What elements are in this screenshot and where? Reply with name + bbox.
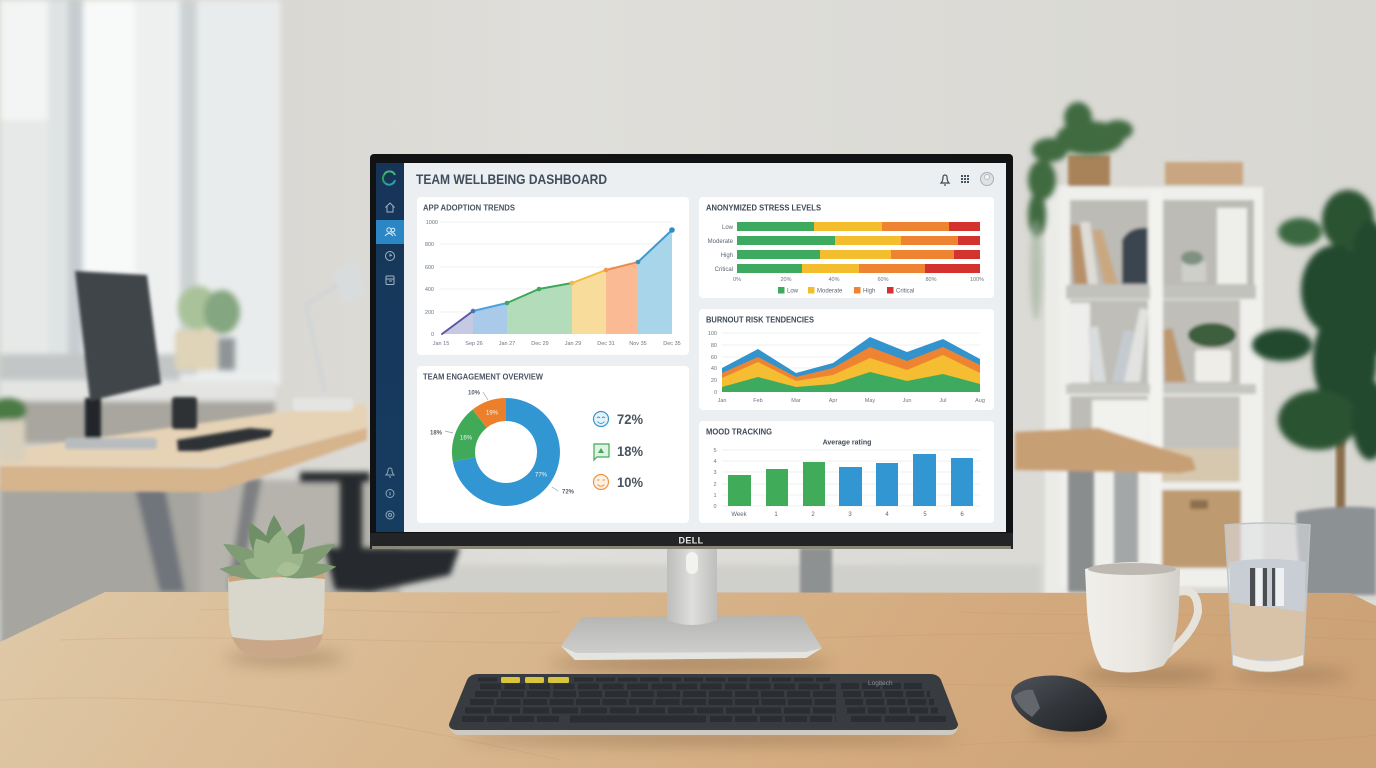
window [0,0,280,443]
stacked area chart: Jul [939,398,947,404]
large floor plant [1252,190,1376,595]
stacked area chart: Feb [753,398,763,404]
monitor [370,154,1013,549]
bar chart: 6 [960,512,964,518]
chart subtitle: Average rating [823,440,871,446]
heading: BURNOUT RISK TENDENCIES [706,314,814,324]
bar chart: 2 [713,482,717,488]
bar chart: 3 [713,470,717,476]
right desk [1015,428,1196,592]
stacked bar chart: 40% [828,277,840,283]
area chart: Dec 29 [531,341,549,347]
icon: home [386,203,394,212]
stacked area chart: May [865,398,875,404]
stacked area chart [708,331,985,404]
bar chart: 1 [713,493,717,499]
left background monitor [65,271,273,451]
hanging plant [1028,102,1133,320]
donut chart: 10% [468,390,481,396]
area chart: Jan 29 [565,341,581,347]
far monitor-side stand leg [800,548,832,596]
area chart: 200 [425,310,434,316]
keyboard [449,674,958,735]
panel: mood tracking [699,421,994,523]
bar chart: 5 [923,512,927,518]
mouse [1011,676,1107,732]
area chart: Jan 27 [499,341,515,347]
panel: anonymized stress levels [699,197,994,298]
stat: 72% happy: 72% [617,411,644,427]
area chart: Sep 26 [465,341,483,347]
bar chart [713,448,980,518]
chair [300,472,460,592]
heading: TEAM ENGAGEMENT OVERVIEW [423,372,544,382]
keys [462,680,946,719]
area chart: 600 [425,265,434,271]
donut chart: 18% [430,430,443,436]
bar chart: 4 [713,459,717,465]
stacked area chart: Mar [791,398,801,404]
stacked area chart: 0 [714,390,717,396]
stacked area chart: Aug [975,398,985,404]
bar chart: 2 [811,512,815,518]
icon: users [385,228,396,236]
stacked area chart: Jan [718,398,726,404]
panel: app adoption trends [417,197,689,355]
icon: avatar [980,172,994,186]
stacked area chart: Jun [903,398,911,404]
icon: logo [383,171,395,185]
area chart: 400 [425,287,434,293]
area chart: Dec 35 [663,341,681,347]
donut chart [430,390,575,506]
donut chart: 77% [535,472,548,478]
panel: burnout risk tendencies [699,309,994,410]
top bar icons [941,172,994,186]
heading: APP ADOPTION TRENDS [423,202,515,212]
stacked bar chart [708,222,984,294]
area chart [425,220,681,347]
brand logo: DELL [678,536,704,546]
panel: team engagement overview [417,366,689,523]
monitor bezel [370,154,1013,549]
sidebar [376,163,404,532]
stat: 18% feedback [594,443,644,460]
desk lamp [293,256,367,411]
dashboard screen [376,163,1006,532]
succulent in ceramic pot [219,515,339,659]
monitor stand [561,546,822,660]
stacked bar chart: Critical [715,267,733,273]
donut chart: 19% [486,410,499,416]
stacked area chart: 100 [708,331,717,337]
legend [778,287,914,294]
bar chart: 1 [774,512,778,518]
stacked bar chart: 0% [733,277,741,283]
stacked area chart: 60 [711,355,717,361]
bar chart: 3 [848,512,852,518]
leaves [219,515,339,584]
title: TEAM WELLBEING DASHBOARD [416,171,607,187]
stacked area chart: Apr [829,398,837,404]
window plants [0,286,240,462]
left desk [0,404,367,492]
icon: app grid [961,175,969,183]
icon: clock [386,252,394,260]
bar chart: 4 [885,512,889,518]
stacked bar chart: 80% [925,277,937,283]
shadows on desk [225,652,1350,744]
bar chart: Week [731,512,748,518]
icon: bell [386,468,394,477]
area chart: Jan 15 [433,341,449,347]
stacked bar chart: Moderate [708,239,734,245]
donut chart: 16% [460,436,473,442]
stacked bar chart: 60% [877,277,889,283]
pot [228,572,325,659]
area chart: 0 [431,332,434,338]
heading: MOOD TRACKING [706,426,772,436]
area chart: Nov 35 [629,341,647,347]
stacked bar chart: High [721,253,733,259]
icon: settings [386,511,394,519]
area chart: Dec 31 [597,341,615,347]
floor and under-desk region [0,478,1040,648]
heading: ANONYMIZED STRESS LEVELS [706,202,821,212]
stat: 72% happy [594,411,644,427]
icon: calendar [386,276,394,284]
stacked area chart: 20 [711,378,717,384]
stacked bar chart: 20% [780,277,792,283]
brand label: Logitech [868,680,893,687]
desk surface [0,592,1376,768]
books [1070,225,1088,284]
stat: 10% neutral: 10% [617,474,644,490]
stacked area chart: 80 [711,343,717,349]
coffee mug [1085,562,1198,673]
stat: 10% neutral [594,474,644,490]
legend: Moderate [817,288,843,294]
icon: notification bell [941,175,949,185]
legend: High [863,288,875,294]
area chart: 800 [425,242,434,248]
stacked bar chart: 100% [970,277,984,283]
water glass [1225,523,1310,672]
bar chart: 0 [713,504,717,510]
donut chart: 72% [562,490,575,496]
stacked area chart: 40 [711,366,717,372]
stat: 18% feedback: 18% [617,443,644,459]
yellow function keys [501,677,569,683]
bookshelf [1045,155,1263,595]
bar chart: 5 [713,448,717,454]
legend: Critical [896,288,914,294]
icon: info [386,490,394,498]
legend: Low [787,288,799,294]
stacked bar chart: Low [722,225,734,231]
area chart: 1000 [426,220,438,226]
